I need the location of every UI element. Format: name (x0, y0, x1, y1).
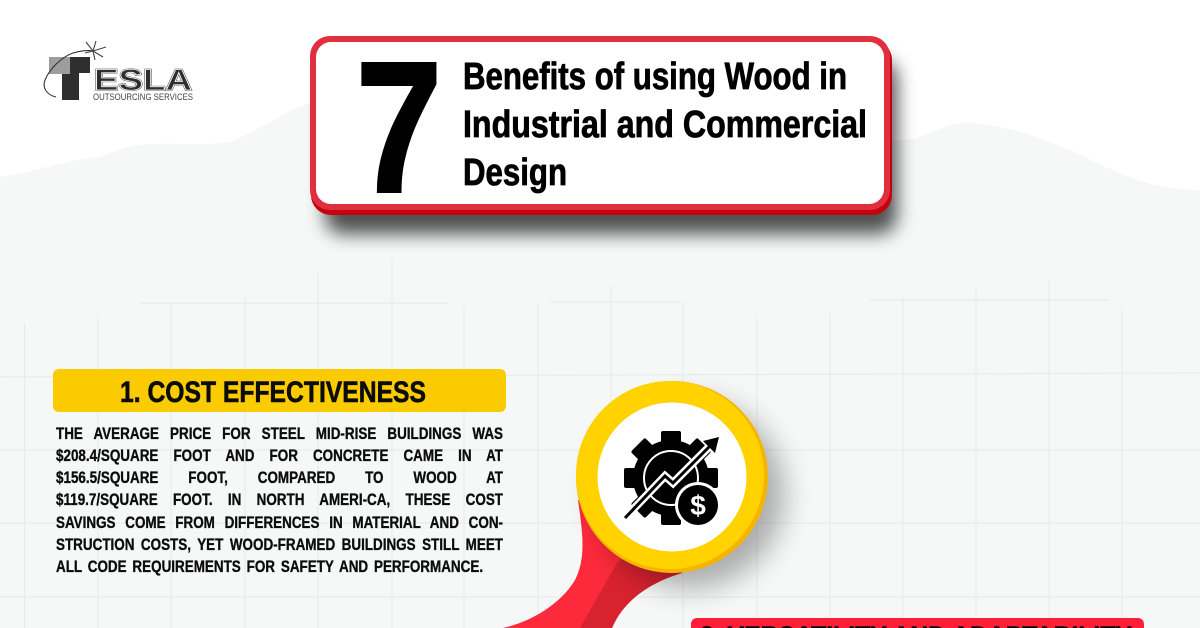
big numeral 7: 7 (356, 24, 442, 232)
title text: Industrial and Commercial (463, 104, 867, 146)
icon: gear with rising arrow and dollar coin: $ (690, 490, 706, 521)
section 1 body text: $208.4/SQUARE FOOT AND FOR CONCRETE CAME IN AT (56, 447, 503, 465)
section 1 body text: STRUCTION COSTS, YET WOOD-FRAMED BUILDINGS STILL MEET (56, 536, 503, 554)
title text: Benefits of using Wood in (463, 56, 847, 98)
section 1 body text: $156.5/SQUARE FOOT, COMPARED TO WOOD AT (56, 469, 503, 487)
logo: Tesla Outsourcing Services: OUTSOURCING SERVICES (93, 92, 193, 102)
section 1 body text: SAVINGS COME FROM DIFFERENCES IN MATERIAL AND CON- (56, 514, 503, 532)
section 1 heading bar: 1. COST EFFECTIVENESS (120, 376, 426, 409)
section 1 body text: ALL CODE REQUIREMENTS FOR SAFETY AND PERFORMANCE. (56, 558, 483, 576)
badge circle (576, 381, 784, 588)
logo: Tesla Outsourcing Services: ESLA (94, 64, 192, 97)
title text (463, 56, 867, 194)
icon: gear with rising arrow and dollar coin (622, 431, 721, 528)
section 1 body text: $119.7/SQUARE FOOT. IN NORTH AMERI-CA, THESE COST (56, 491, 503, 509)
red timeline connector (503, 500, 682, 628)
logo: Tesla Outsourcing Services: ESLA (94, 64, 192, 97)
section 1 body text (56, 425, 503, 576)
section 1 body text: THE AVERAGE PRICE FOR STEEL MID-RISE BUILDINGS WAS (56, 425, 503, 443)
title text: Design (463, 152, 567, 194)
